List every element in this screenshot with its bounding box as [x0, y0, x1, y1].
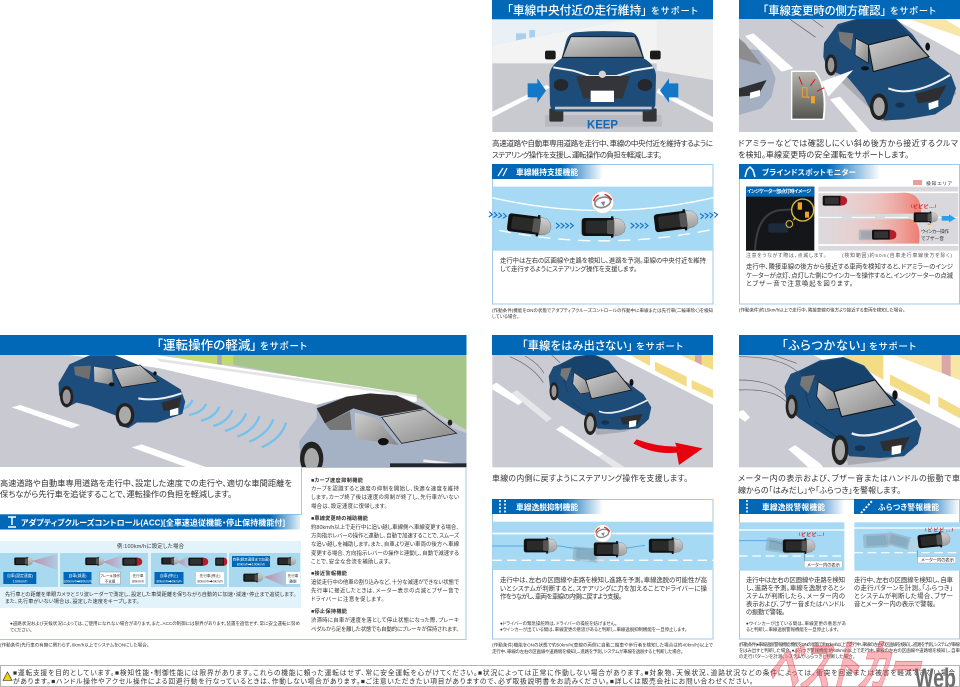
related functions text: ■カーブ速度抑制機能	[311, 476, 364, 484]
heading: do not leave the lane: 「車線をはみ出さない」	[522, 339, 633, 353]
related functions text: ペダルから足を離した状態でも自動的にブレーキが保持されます。	[311, 625, 459, 633]
diagram labels: \ピピピ…/	[911, 204, 937, 210]
panel: no wandering	[738, 335, 960, 660]
scenario: accelerating: 自車(設定速度まで加速)	[233, 557, 269, 562]
diagram: ACC scenarios: また、先行車がいない場合は、設定した速度をキープします。	[5, 598, 139, 605]
related functions text: 約80km/h以上で走行中に追い越し車線側へ車線変更する場合、	[311, 523, 459, 531]
box header: 車線維持支援機能	[516, 167, 578, 177]
related functions text: ■接近警報機能	[311, 569, 348, 577]
disclaimer strip: ■運転支援を目的としています。■検知性能・制御性能には限界があります。これらの機能に頼った運転はせず、常に安全運転を心がけてください。■状況によっては正常に作動しない場合があります。■対象物、天候状況、道路状況などの条件によっては、衝突を回避または被害を軽減できない場合	[13, 668, 955, 677]
body text: 線からの「はみだし」や「ふらつき」を警報します。	[738, 485, 901, 495]
footnote: (作動条件)機能をONの状態で約50km/h(車線の両側に自動二輪車や歩行者を検知した場合は約40km/h)以上で	[492, 642, 714, 648]
diagram labels: 注意をうながす際は、点滅します。	[746, 252, 826, 259]
scenario: cruising: 100km/h	[13, 578, 27, 583]
footnote: (作動条件)約15km/h以上で走行中、隣接車線の後方より接近する車両を検知した場合。	[739, 306, 905, 314]
scenario: accelerating: 先行車	[288, 573, 299, 578]
scenario: decelerating: 先行車	[132, 573, 144, 578]
body text: メーター内の表示および、ブザー音またはハンドルの振動で車	[738, 473, 960, 483]
footnote: している場合。	[492, 313, 519, 320]
footnote: をはみ出すと判断した場合。●ふらつき警報機能:約60km/h以上で走行中、車線の左右の区画線や道路端を検知し、自車	[739, 647, 960, 654]
illustration: car front view with KEEP arrows	[492, 19, 713, 132]
panel: lane departure prevention	[492, 335, 714, 655]
footnote: (作動条件)先行車の有無に関わらず、0km/h以上でシステムをONにした場合。	[0, 642, 149, 648]
body text: を検知。車線変更時の安全運転をサポートします。	[738, 150, 909, 160]
sub panel: wandering warning: ふらつき警報機能	[878, 502, 939, 512]
box header	[739, 164, 880, 179]
illustration: car front view with KEEP arrows: KEEP	[587, 120, 618, 132]
scenario: stopping: 自車(停止)	[160, 573, 179, 578]
description: いとシステムが判断すると、ステアリングに力を加えることでドライバーに操	[500, 583, 708, 592]
heading: lane centre keeping: をサポート	[651, 6, 698, 16]
heading: reduce driving operations: をサポート	[260, 340, 307, 352]
box header	[492, 164, 603, 179]
box header: ブラインドスポットモニター	[762, 167, 856, 177]
notes: ●ドライバーの緊急操舵時は、ドライバーの操舵を妨げません。	[500, 620, 617, 627]
diagram: detection area road	[818, 187, 958, 251]
feature box: lane keeping assist	[489, 164, 718, 304]
notes	[500, 620, 687, 633]
diagram labels: ウインカー操作	[921, 228, 949, 235]
related functions text: 先行車に接近したときは、メーター表示の点滅とブザー音で	[311, 586, 459, 594]
heading: no wandering: をサポート	[869, 342, 916, 352]
heading: lane centre keeping: 「車線中央付近の走行維持」	[507, 3, 647, 17]
related functions text: 場合は、設定速度に復帰します。	[311, 502, 387, 510]
related functions text: ■車線変更時の補助機能	[311, 514, 369, 522]
related functions text: ドライバーに注意を促します。	[311, 595, 384, 603]
scenario: stopping: 80km/h➡0km/h	[156, 579, 182, 583]
box header: ACC	[0, 514, 300, 530]
sub panel: wandering warning: とシステムが判断した場合、ブザー	[854, 591, 953, 600]
related functions text: 方向指示レバーの操作と連動し、自動で加速することで、スムーズ	[311, 532, 460, 540]
sub panel: lane departure warning: 走行中は左右の区画線や走路を検知	[746, 575, 845, 584]
panel: adaptive cruise control	[0, 335, 467, 648]
heading: lane change side check	[739, 0, 960, 20]
related functions text: します。カーブ終了後は速度の抑制が終了し、先行車がいない	[311, 493, 459, 501]
description	[500, 256, 707, 273]
car: blue SUV	[59, 356, 184, 427]
ACC note	[10, 620, 301, 634]
feature box: warnings	[739, 499, 960, 639]
diagram: ACC scenarios: 例:100km/hに設定した場合	[117, 542, 185, 550]
illustration: car with tyre tracks	[739, 355, 960, 467]
diagram: ACC scenarios: 先行車との距離を単眼カメラとミリ波レーダーで測定し、設定した車間距離を保ちながら自動的に加速・減速・停止まで追従します。	[5, 591, 296, 598]
sub panel: wandering warning: の走行パターンを計測。「ふらつき」	[854, 583, 953, 592]
box header: ACC: アダプティブクルーズコントロール(ACC)[全車速追従機能・停止保持機能付]	[21, 517, 285, 527]
related functions text: な追い越しを補助します。また、自車より遅い車両の後方へ車線	[311, 540, 460, 548]
scenario: cruising	[0, 553, 58, 587]
heading: do not leave the lane	[492, 335, 713, 355]
sub panel: wandering warning: メーター内の表示	[921, 556, 955, 564]
heading: reduce driving operations: 「運転操作の軽減」	[157, 338, 257, 353]
description: 走行中は、左右の区画線や走路を検知し進路を予測。車線逸脱の可能性が高	[500, 575, 707, 584]
footnote: の走行パターンを計測。システムがふらつきと判断した場合。	[739, 653, 855, 660]
body text: 車線の内側に戻すようにステアリング操作を支援します。	[492, 473, 688, 483]
footnote	[492, 642, 714, 655]
heading: lane change side check: をサポート	[890, 6, 936, 16]
diagram: straight lane with returning car	[492, 522, 713, 570]
body text	[0, 478, 292, 499]
scenario: decelerating: 80km/h	[132, 579, 144, 583]
ACC note: てください。	[10, 626, 32, 634]
scenario: cruising: 自車(設定速度)	[7, 573, 34, 578]
diagram labels: (検知範囲)約50m(自車走行車線後方を除く)	[842, 252, 952, 259]
heading: reduce driving operations	[0, 335, 466, 355]
illustration: car with red steer arrow	[492, 355, 713, 467]
body text	[738, 138, 958, 160]
scenario: decelerating: 自車(減速)	[68, 573, 87, 578]
heading: do not leave the lane: をサポート	[636, 342, 683, 352]
scenario: decelerating: 不支援	[105, 578, 116, 583]
heading: no wandering: 「ふらつかない」	[782, 338, 867, 353]
footnote: 走行中、車線の左右の区画線や道路端を検知し、進路を予測。システムが車線を逸脱すると判断した場合。	[492, 648, 683, 655]
sub panel: lane departure warning: \ピピピ…/	[799, 532, 825, 537]
heading: lane change side check: 「車線変更時の側方確認」	[763, 3, 886, 17]
scenario: stopping	[151, 553, 227, 587]
description: とブザー音で注意喚起を図ります。	[746, 279, 853, 288]
body text	[492, 138, 713, 160]
sub panel: lane departure warning	[739, 499, 847, 633]
related functions text: ■停止保持機能	[311, 607, 348, 615]
description: 作をうながし、車両を車線の内側に戻すよう支援。	[500, 592, 622, 601]
photo: indicator lamp	[746, 187, 814, 251]
diagram: ACC scenarios	[0, 541, 301, 608]
sub panel: wandering warning	[854, 499, 960, 608]
legend: detection area: 検知エリア	[926, 180, 952, 187]
legend: detection area	[913, 180, 952, 187]
body text	[738, 473, 960, 495]
illustration: car with mirror indicator	[739, 19, 960, 132]
box header	[492, 499, 603, 514]
footnote	[739, 641, 960, 660]
disclaimer strip: があります。■ハンドル操作やアクセル操作による回避行動を行なっているときは、作動しない場合があります。■ご注意いただきたい項目がありますので、必ず取扱説明書をお読みください。■詳しくは販売会社にお問い合わせください。	[13, 676, 753, 686]
related functions text: ことで、安全な合流を補助します。	[311, 558, 391, 566]
scenario: decelerating: ブレーキ操作	[100, 573, 121, 578]
scenario: decelerating	[60, 553, 148, 587]
description	[500, 575, 708, 601]
box header: 車線逸脱抑制機能	[516, 502, 578, 512]
related functions text: 変更する場合、方向指示レバーの操作と連動し、自動で減速する	[311, 549, 459, 557]
body text: 高速道路や自動車専用道路を走行中、車線の中央付近を維持するように	[492, 138, 713, 148]
scenario: accelerating: 80km/h➡100km/h	[237, 562, 265, 566]
scenario: stopping: 80km/h➡0km/h	[197, 579, 223, 583]
photo: indicator lamp: インジケーター部点灯時イメージ	[747, 188, 811, 195]
related functions text: 渋滞時に自車が速度を落として停止状態になった際、ブレーキ	[311, 616, 459, 624]
footnote: (作動条件)機能をONの状態でアダプティブクルーズコントロールの作動中に車線または先行車(二輪車除く)を検知	[492, 307, 714, 314]
icon: warning triangle	[3, 672, 12, 680]
sub panel: wandering warning: 音とメーター内の表示で警報。	[854, 599, 936, 608]
scenario: decelerating: 100km/h➡80km/h	[63, 579, 92, 583]
sub panel: lane departure warning: ステムが判断したら、メーター内の	[746, 591, 845, 600]
disclaimer strip	[0, 666, 960, 686]
feature box outline	[0, 468, 466, 640]
car: blue SUV rear quarter	[824, 19, 957, 122]
sub panel: lane departure warning: ると判断し、車線逸脱警報機能を一旦停止します。	[746, 626, 839, 633]
scenario: accelerating	[229, 553, 300, 587]
description: 走行中は左右の区画線や走路を検知し、進路を予測。車線の中央付近を維持	[500, 256, 707, 264]
feature box: lane departure suppression	[492, 499, 713, 639]
diagram labels	[746, 204, 952, 259]
sub panel: lane departure warning: 表示および、ブザー音またはハンドル	[746, 599, 846, 608]
diagram labels: でブザー音	[921, 235, 944, 242]
footnote	[492, 307, 714, 320]
sub panel: wandering warning: 走行中、左右の区画線を検知し、自車	[854, 575, 954, 584]
body text: 高速道路や自動車専用道路を走行中、設定した速度での走行や、適切な車間距離を	[0, 478, 292, 488]
related functions text: 追従走行中の他車の割り込みなど、十分な減速ができない状態で	[311, 578, 459, 586]
sub panel: lane departure warning: の振動で警報。	[746, 607, 785, 616]
heading: no wandering	[739, 335, 960, 355]
ACC note: ●道路状況および天候状況によっては、ご使用になれない場合があります。また、ACCの制御には限界があります。装置を過信せず、常に安全運転に努め	[10, 620, 301, 627]
car: preceding grey car	[299, 393, 467, 475]
description: して走行するようにステアリング操作を支援します。	[500, 264, 637, 273]
notes: ●ウインカーが出ている間は、車線変更の意思があると判断し、車線逸脱抑制機能を一旦停止します。	[500, 626, 687, 633]
sub panel: lane departure warning: 車線逸脱警報機能	[762, 502, 825, 512]
sub panel: lane departure warning: し、進路を予測。車線を逸脱するとシ	[746, 583, 845, 592]
related functions text: カーブを認識すると速度の抑制を開始し、快適な速度を維持	[311, 484, 460, 492]
body text: ドアミラーなどでは確認しにくい斜め後方から接近するクルマ	[738, 138, 958, 148]
panel: blind spot check	[738, 0, 960, 314]
body text: 保ちながら先行車を追従することで、運転操作の負担を軽減します。	[0, 489, 232, 499]
sub panel: wandering warning: \ピピピ…/	[925, 528, 954, 532]
related functions text	[311, 476, 460, 633]
scenario: stopping: 先行車(停止)	[200, 573, 220, 578]
sub panel: lane departure warning: ●ウインカーが出ている間は、車線変更の意思があ	[746, 620, 847, 627]
sub panel: lane departure warning: メーター内の表示	[807, 562, 841, 568]
panel: lane centre keeping	[489, 0, 718, 320]
description	[746, 262, 954, 288]
illustration: following a vehicle with radar	[0, 355, 467, 475]
body text: ステアリング操作を支援し、運転操作の負担を軽減します。	[492, 150, 662, 160]
feature box: blind spot monitor	[739, 164, 960, 304]
description: ケーターが点灯、点灯した側にウインカーを操作すると、インジケーターの点滅	[746, 270, 954, 279]
diagram: curved lane with cars	[489, 187, 718, 251]
footnote: (作動条件)●車線逸脱警報機能:機能をONの状態で約60km/h以上で走行中、車線の左右の区画線を検知し、進路を予測。システムが車線	[739, 641, 960, 648]
scenario: accelerating: 離脱	[289, 578, 297, 583]
heading: lane centre keeping	[492, 0, 713, 20]
description: 走行中、隣接車線の後方から接近する車両を検知すると、ドアミラーのインジ	[746, 262, 954, 271]
